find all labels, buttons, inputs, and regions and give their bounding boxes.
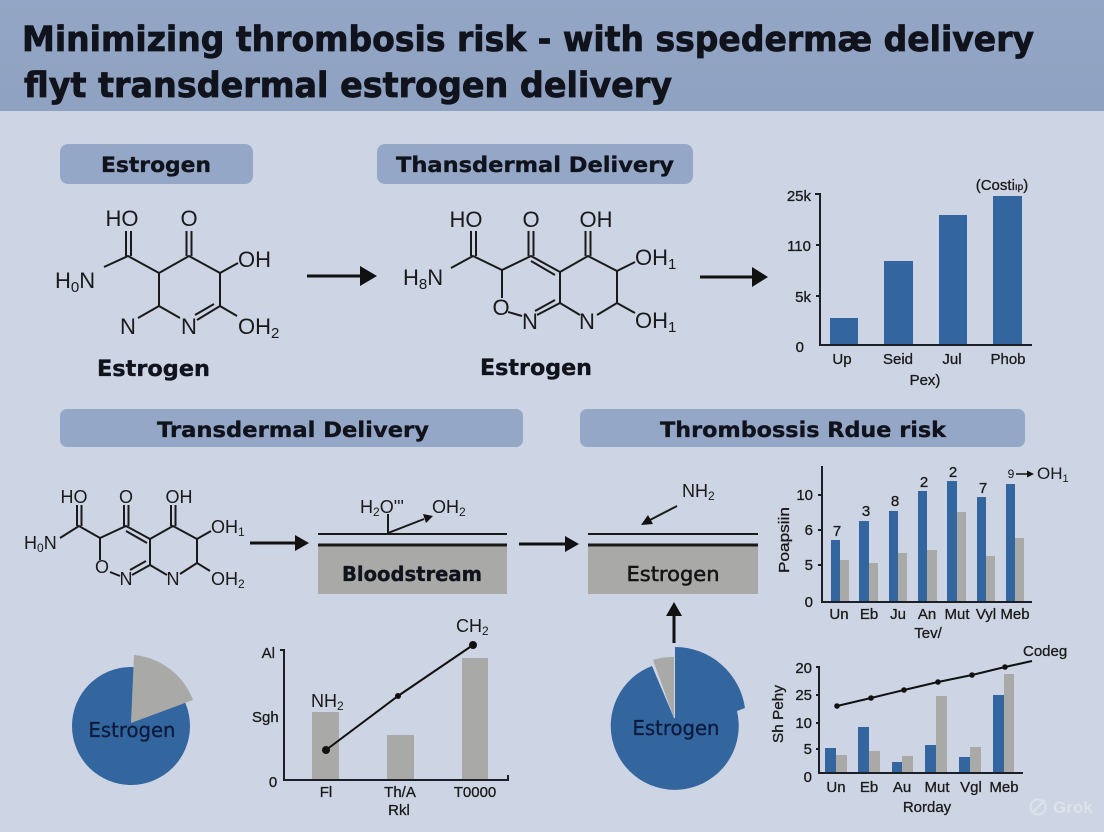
line and bar chart: risk: Fl [320, 784, 332, 801]
grouped bar chart: popsin: 9 [1008, 467, 1015, 481]
molecule: estrogen structure 2: 1 [668, 256, 676, 273]
title banner: flyt transdermal estrogen delivery [24, 66, 672, 106]
molecule: estrogen structure 1 [55, 206, 279, 342]
combo chart: bars with trend line: 10 [795, 715, 812, 732]
molecule: estrogen structure 1: N [120, 314, 136, 339]
molecule: estrogen structure 2: OH [635, 245, 668, 270]
molecule: estrogen structure 1: 0 [71, 279, 79, 296]
grouped bar chart: popsin: Eb [860, 606, 878, 623]
diagram: bloodstream layer [318, 497, 507, 594]
title banner: Minimizing thrombosis risk - with sspedermæ delivery [22, 20, 1034, 60]
line and bar chart: risk: Al [262, 645, 275, 662]
grouped bar chart: popsin: Meb [1000, 606, 1030, 623]
molecule: estrogen structure 1: OH [238, 247, 271, 272]
grouped bar chart: popsin: Mut [944, 606, 970, 623]
line and bar chart: risk: Sgh [252, 709, 279, 726]
molecule: estrogen structure 3: HO [60, 487, 88, 507]
grouped bar chart: popsin: 1 [1062, 473, 1069, 485]
grouped bar chart: popsin: Poapsiin [776, 507, 793, 573]
molecule: estrogen structure 1: H [55, 268, 71, 293]
bar chart: cost: 0 [796, 339, 804, 356]
label: Estrogen 2: Estrogen [480, 356, 592, 381]
line and bar chart: risk: Th/A [384, 784, 416, 801]
molecule: estrogen structure 2: 8 [419, 276, 427, 293]
molecule: estrogen structure 1: N [181, 314, 197, 339]
grouped bar chart: popsin: 2 [949, 464, 957, 481]
combo chart: bars with trend line: 0 [804, 769, 812, 786]
molecule: estrogen structure 2 [403, 207, 676, 336]
grouped bar chart: popsin: 5 [805, 557, 813, 574]
grouped bar chart: popsin: 7 [833, 523, 841, 540]
bar chart: cost [787, 177, 1032, 389]
molecule: estrogen structure 3: O [119, 487, 133, 507]
molecule: estrogen structure 2: O [522, 207, 540, 232]
grouped bar chart: popsin: 2 [920, 474, 928, 491]
combo chart: bars with trend line: Sh Pehy [770, 685, 787, 743]
pie chart: left [72, 655, 193, 785]
molecule: estrogen structure 3: O [95, 557, 109, 577]
diagram: bloodstream layer: 2 [373, 505, 380, 519]
heading pill: Thrombossis risk: Thrombossis Rdue risk [660, 418, 947, 442]
line and bar chart: risk: T0000 [454, 784, 496, 801]
combo chart: bars with trend line: 5 [804, 741, 812, 758]
diagram: bloodstream layer: H [360, 497, 373, 517]
heading pill: Thrombossis risk [580, 409, 1025, 447]
grouped bar chart: popsin: 8 [891, 493, 899, 510]
arrow: estrogen to transdermal [307, 266, 377, 286]
line and bar chart: risk: 2 [337, 699, 344, 713]
bar chart: cost: Phob [990, 351, 1026, 368]
pie chart: centre: Estrogen [632, 716, 720, 740]
diagram: bloodstream layer: OH [432, 497, 459, 517]
bar chart: cost: Jul [942, 351, 962, 368]
molecule: estrogen structure 3: N [166, 569, 180, 589]
heading pill: Transdermal Delivery: Transdermal Delivery [157, 418, 429, 442]
combo chart: bars with trend line: Rorday [903, 799, 952, 816]
watermark: Grok: Grok [1053, 798, 1093, 817]
arrow: pie up to estrogen layer [666, 602, 682, 643]
molecule: estrogen structure 1: HO [106, 206, 138, 231]
molecule: estrogen structure 1: N [79, 268, 95, 293]
line and bar chart: risk: 0 [269, 774, 277, 791]
combo chart: bars with trend line: Meb [989, 779, 1019, 796]
diagram: bloodstream layer: O''' [380, 497, 404, 517]
arrow: transdermal to chart [700, 267, 768, 287]
molecule: estrogen structure 1: O [180, 206, 198, 231]
heading pill: Transdermal Delivery [60, 409, 523, 447]
molecule: estrogen structure 3: 2 [238, 577, 245, 591]
grouped bar chart: popsin [776, 464, 1069, 642]
label: Estrogen 1: Estrogen [97, 357, 210, 382]
molecule: estrogen structure 2: H [403, 265, 419, 290]
heading pill: Thansdermal Delivery [377, 144, 693, 184]
diagram: estrogen layer [588, 481, 758, 594]
combo chart: bars with trend line: Au [893, 779, 911, 796]
molecule: estrogen structure 2: OH [580, 207, 612, 232]
heading pill: Thansdermal Delivery: Thansdermal Delivery [396, 153, 674, 177]
grouped bar chart: popsin: Vyl [976, 606, 996, 623]
combo chart: bars with trend line: Codeg [1023, 643, 1067, 660]
watermark: Grok [1030, 798, 1093, 817]
combo chart: bars with trend line: 20 [795, 660, 812, 677]
diagram: estrogen layer: 2 [708, 489, 715, 503]
molecule: estrogen structure 2: N [579, 309, 595, 334]
grouped bar chart: popsin: 3 [862, 503, 870, 520]
diagram: estrogen layer: NH [682, 481, 708, 501]
combo chart: bars with trend line: Un [826, 779, 846, 796]
molecule: estrogen structure 1: 2 [271, 325, 279, 342]
molecule: estrogen structure 3: OH [166, 487, 192, 507]
molecule: estrogen structure 2: OH [635, 308, 668, 333]
combo chart: bars with trend line: Vgl [960, 779, 982, 796]
grouped bar chart: popsin: OH [1037, 464, 1062, 483]
diagram: bloodstream layer: 2 [459, 505, 466, 519]
grouped bar chart: popsin: Ju [890, 606, 906, 623]
grouped bar chart: popsin: 0 [805, 594, 813, 611]
grouped bar chart: popsin: An [918, 606, 936, 623]
grouped bar chart: popsin: 10 [796, 487, 813, 504]
title banner [0, 0, 1104, 111]
grouped bar chart: popsin: Tev/ [914, 625, 943, 642]
arrow: molecule to bloodstream [250, 535, 309, 551]
diagram: estrogen layer: Estrogen [626, 562, 720, 586]
molecule: estrogen structure 2: O [492, 295, 510, 320]
combo chart: bars with trend line: 25 [795, 687, 812, 704]
grouped bar chart: popsin: 7 [979, 480, 987, 497]
molecule: estrogen structure 2: 1 [668, 319, 676, 336]
bar chart: cost: (Costiıp) [976, 177, 1028, 194]
pie chart: left: Estrogen [88, 718, 176, 742]
combo chart: bars with trend line: Eb [860, 779, 878, 796]
line and bar chart: risk: 2 [482, 624, 489, 638]
arrow: bloodstream to estrogen layer [519, 536, 579, 552]
molecule: estrogen structure 3: H [24, 533, 37, 553]
molecule: estrogen structure 3: 1 [238, 525, 245, 539]
molecule: estrogen structure 3: OH [211, 517, 238, 537]
molecule: estrogen structure 3 [24, 487, 245, 591]
molecule: estrogen structure 3: OH [211, 569, 238, 589]
line and bar chart: risk [252, 616, 508, 819]
bar chart: cost: Up [832, 351, 852, 368]
bar chart: cost: 110 [787, 238, 811, 255]
line and bar chart: risk: Rkl [388, 802, 410, 819]
line and bar chart: risk: CH [456, 616, 482, 636]
line and bar chart: risk: NH [311, 691, 337, 711]
heading pill: Estrogen: Estrogen [101, 153, 211, 177]
molecule: estrogen structure 3: N [44, 533, 57, 553]
diagram: bloodstream layer: Bloodstream [342, 562, 482, 586]
molecule: estrogen structure 3: 0 [37, 541, 44, 555]
bar chart: cost: Seid [883, 351, 913, 368]
molecule: estrogen structure 2: HO [450, 207, 482, 232]
grouped bar chart: popsin: Un [829, 606, 849, 623]
bar chart: cost: Pex) [910, 372, 940, 389]
bar chart: cost: 25k [787, 188, 811, 205]
pie chart: centre [611, 647, 745, 790]
combo chart: bars with trend line [770, 643, 1067, 816]
grouped bar chart: popsin: 6 [805, 522, 813, 539]
bar chart: cost: 5k [795, 289, 811, 306]
heading pill: Estrogen [60, 144, 253, 184]
molecule: estrogen structure 3: N [120, 569, 132, 589]
combo chart: bars with trend line: Mut [924, 779, 950, 796]
molecule: estrogen structure 2: N [427, 265, 443, 290]
molecule: estrogen structure 1: OH [238, 314, 271, 339]
molecule: estrogen structure 2: N [522, 309, 538, 334]
